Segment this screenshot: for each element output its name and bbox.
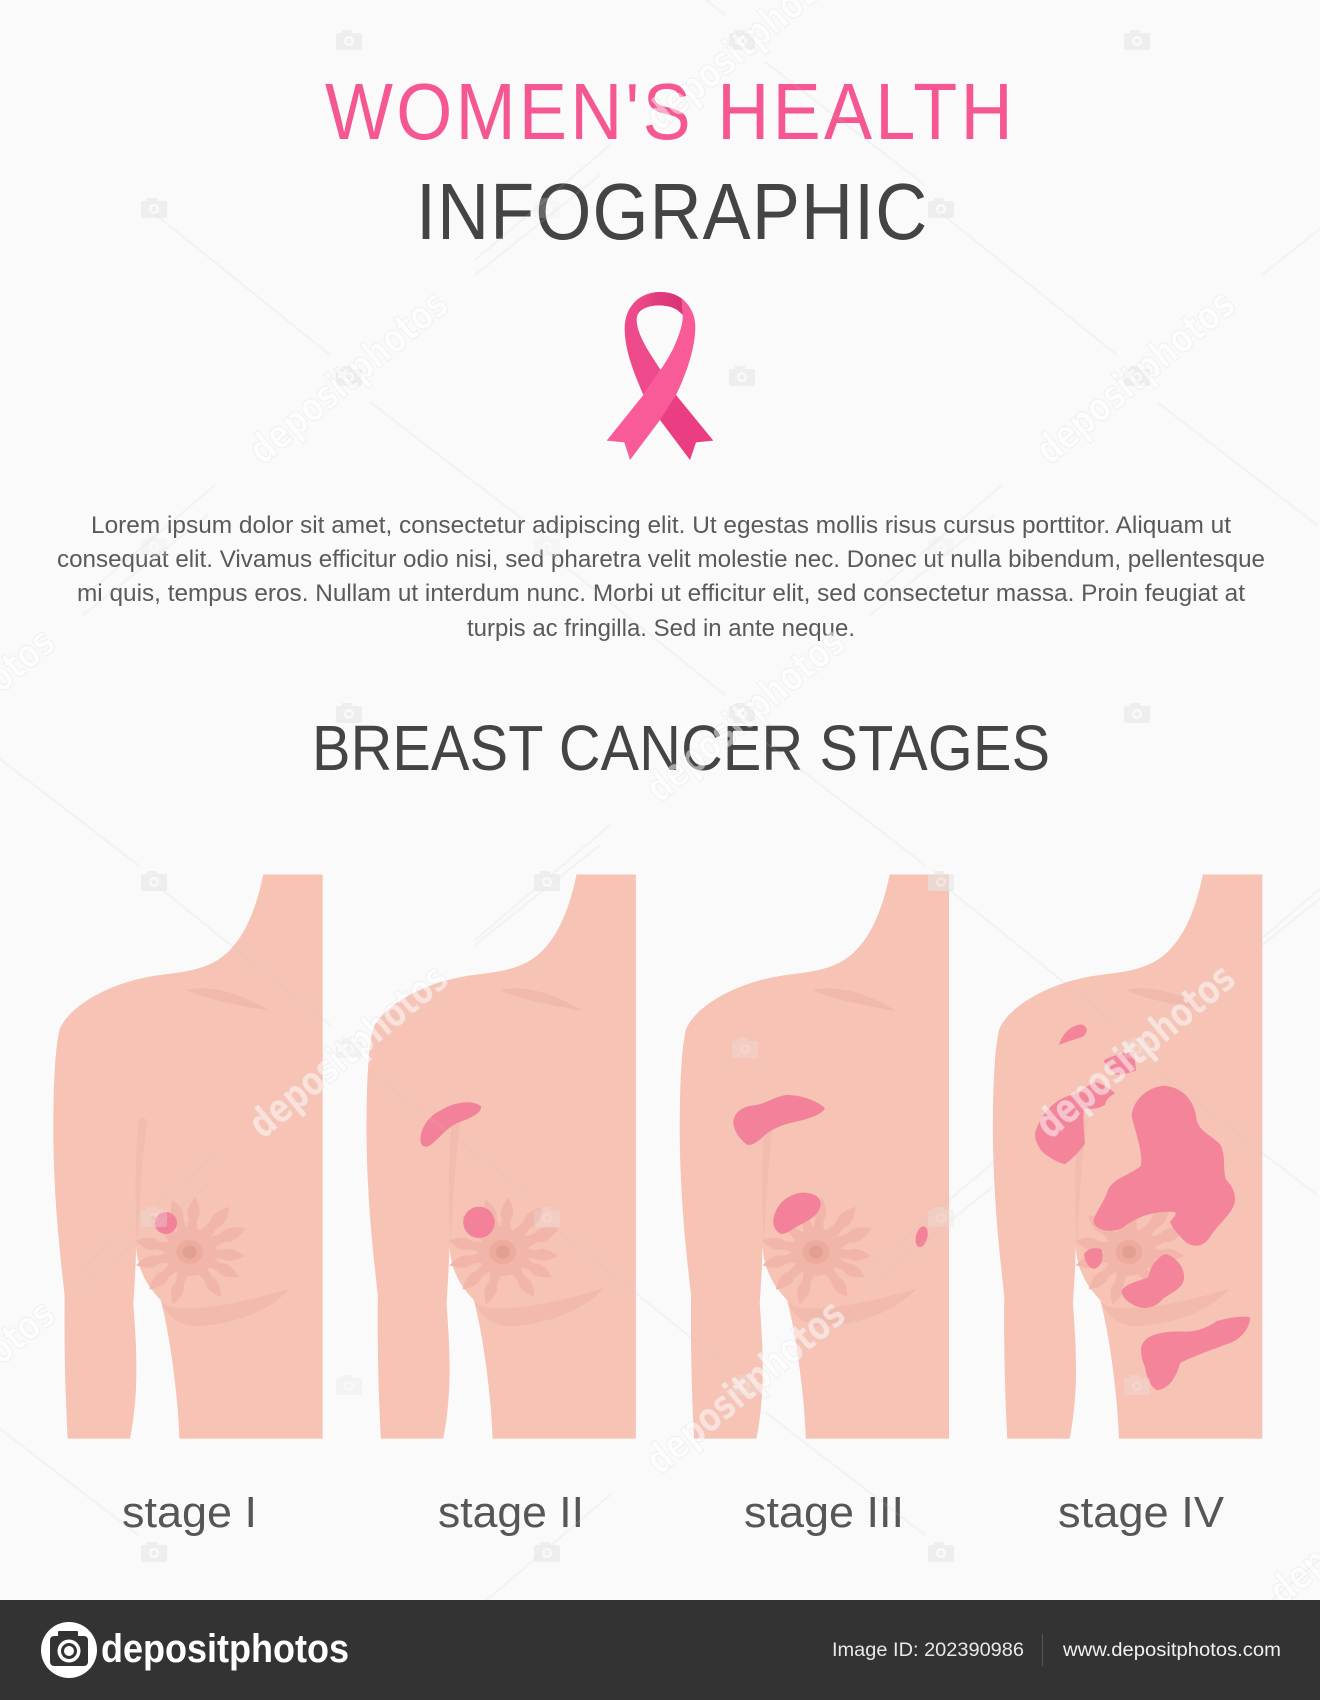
watermark text: depositphotos <box>240 955 457 1148</box>
footer url: www.depositphotos.com <box>1062 1639 1281 1661</box>
icon: depositphotos camera logo <box>41 1622 97 1678</box>
watermark text: depositphotos <box>637 619 854 812</box>
stage labels <box>122 1488 1225 1537</box>
label: stage I: stage I <box>122 1488 257 1537</box>
intro paragraph: mi quis, tempus eros. Nullam ut interdum nunc. Morbi ut efficitur elit, sed consectetur massa. Proin feugiat at <box>77 580 1245 607</box>
intro paragraph: consequat elit. Vivamus efficitur odio nisi, sed pharetra velit molestie nec. Donec ut nulla bibendum, pellentesque <box>57 546 1265 573</box>
icon: pink awareness ribbon <box>607 292 713 460</box>
label: stage II: stage II <box>438 1488 584 1537</box>
tumors: stage III <box>733 1095 930 1248</box>
footer bar <box>0 1600 1320 1700</box>
panel: stage I figure <box>53 875 323 1439</box>
footer image id: Image ID: 202390986 <box>832 1639 1024 1661</box>
tumors: stage II <box>420 1102 495 1238</box>
watermark text: depositphotos <box>240 281 457 474</box>
tumor: stage I <box>155 1212 177 1234</box>
intro paragraph: turpis ac fringilla. Sed in ante neque. <box>467 615 855 642</box>
label: stage III: stage III <box>744 1488 904 1537</box>
panel: stage IV figure <box>993 875 1262 1439</box>
title: infographic: INFOGRAPHIC <box>416 168 927 257</box>
tumors: stage IV <box>1035 1025 1250 1390</box>
intro paragraph: Lorem ipsum dolor sit amet, consectetur adipiscing elit. Ut egestas mollis risus cursus porttitor. Aliquam ut <box>91 512 1231 539</box>
panel: stage III figure <box>680 875 949 1439</box>
panel: stage II figure <box>367 875 636 1439</box>
intro paragraph <box>57 512 1265 642</box>
watermark camera icons <box>141 30 1150 1562</box>
footer logo text: depositphotos <box>101 1627 349 1671</box>
watermark text: depositphotos <box>1027 955 1244 1148</box>
watermark text: depositphotos <box>1027 281 1244 474</box>
heading: breast cancer stages: BREAST CANCER STAGES <box>312 712 1050 784</box>
label: stage IV: stage IV <box>1058 1488 1225 1537</box>
title: women's health: WOMEN'S HEALTH <box>325 68 1013 157</box>
watermark text: depositphotos <box>637 1291 854 1484</box>
